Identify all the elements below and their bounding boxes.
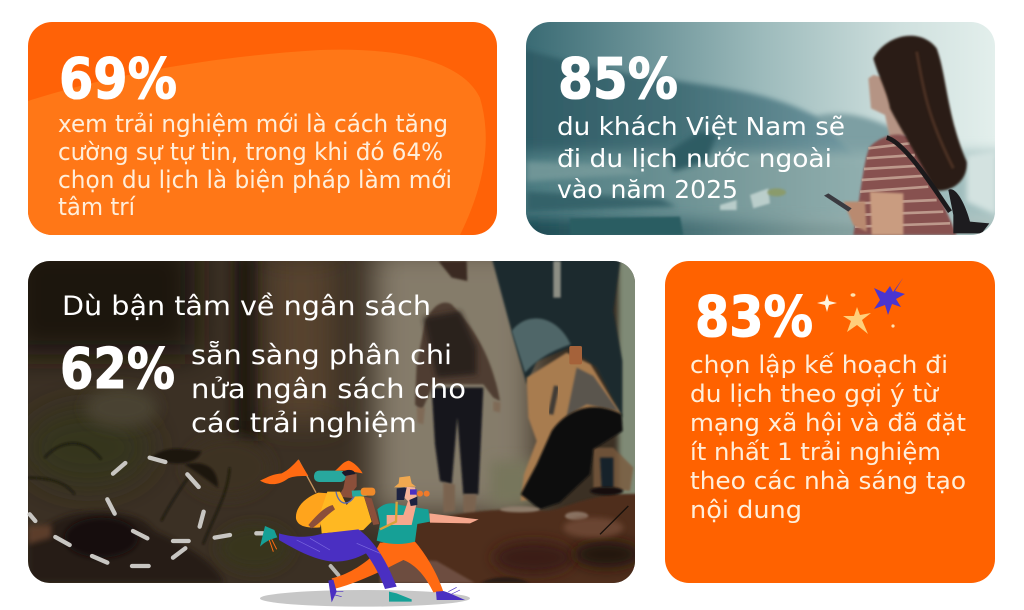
heading: budget: Dù bận tâm về ngân sách: [62, 291, 431, 322]
text block: 85% description: du khách Việt Nam sẽ: [557, 112, 845, 141]
photo: hiker leg and boot: [492, 258, 633, 509]
text block: 62% description: nửa ngân sách cho: [191, 374, 466, 405]
photo: dark forest: [8, 241, 335, 583]
text block: 85% description: [557, 112, 845, 204]
woman hiker: [260, 461, 412, 602]
heading: 69%: 69%: [59, 47, 177, 112]
text block: 69% description: chọn du lịch là biện pháp làm mới: [58, 166, 452, 194]
heading: 85%: 85%: [558, 47, 678, 112]
text block: 69% description: xem trải nghiệm mới là cách tăng: [58, 110, 448, 138]
illustration: two hikers: [260, 459, 479, 607]
text block: 69% description: [58, 110, 452, 221]
text block: 69% description: cường sự tự tin, trong khi đó 64%: [58, 138, 443, 166]
text block: 83% description: ít nhất 1 trải nghiệm: [690, 438, 941, 466]
text block: 62% description: sẵn sàng phân chi: [191, 340, 452, 371]
text block: 62% description: các trải nghiệm: [191, 408, 417, 439]
photo: rocky log: [380, 487, 643, 588]
shadow: [260, 590, 470, 607]
photo: misty trail: [373, 248, 643, 588]
panel: 69% new experiences: [28, 22, 497, 235]
flag: [260, 459, 316, 493]
text block: 62% description: [191, 340, 466, 439]
text block: 69% description: tâm trí: [58, 193, 136, 221]
icon: dashed trail: [30, 458, 263, 566]
panel: 85% travel abroad: [526, 22, 995, 235]
icon: sparkles: [817, 278, 905, 334]
silhouette: distant hiker: [415, 303, 501, 514]
panel: 83% social media: [665, 261, 995, 583]
text block: 85% description: đi du lịch nước ngoài: [557, 144, 832, 173]
text block: 83% description: nội dung: [690, 496, 802, 524]
panel: 62% budget: [28, 261, 635, 583]
man hiker: [328, 476, 479, 602]
text block: 83% description: chọn lập kế hoạch đi: [690, 351, 948, 379]
text block: 83% description: theo các nhà sáng tạo: [690, 467, 966, 495]
text block: 85% description: vào năm 2025: [557, 175, 738, 204]
text block: 83% description: [690, 351, 966, 524]
stat: 62%: 62%: [60, 337, 175, 402]
illustration: woman at the airport: [824, 36, 989, 235]
text block: 83% description: mạng xã hội và đã đặt: [690, 409, 966, 437]
text block: 83% description: du lịch theo gợi ý từ: [690, 380, 940, 408]
heading: 83%: 83%: [695, 285, 813, 350]
